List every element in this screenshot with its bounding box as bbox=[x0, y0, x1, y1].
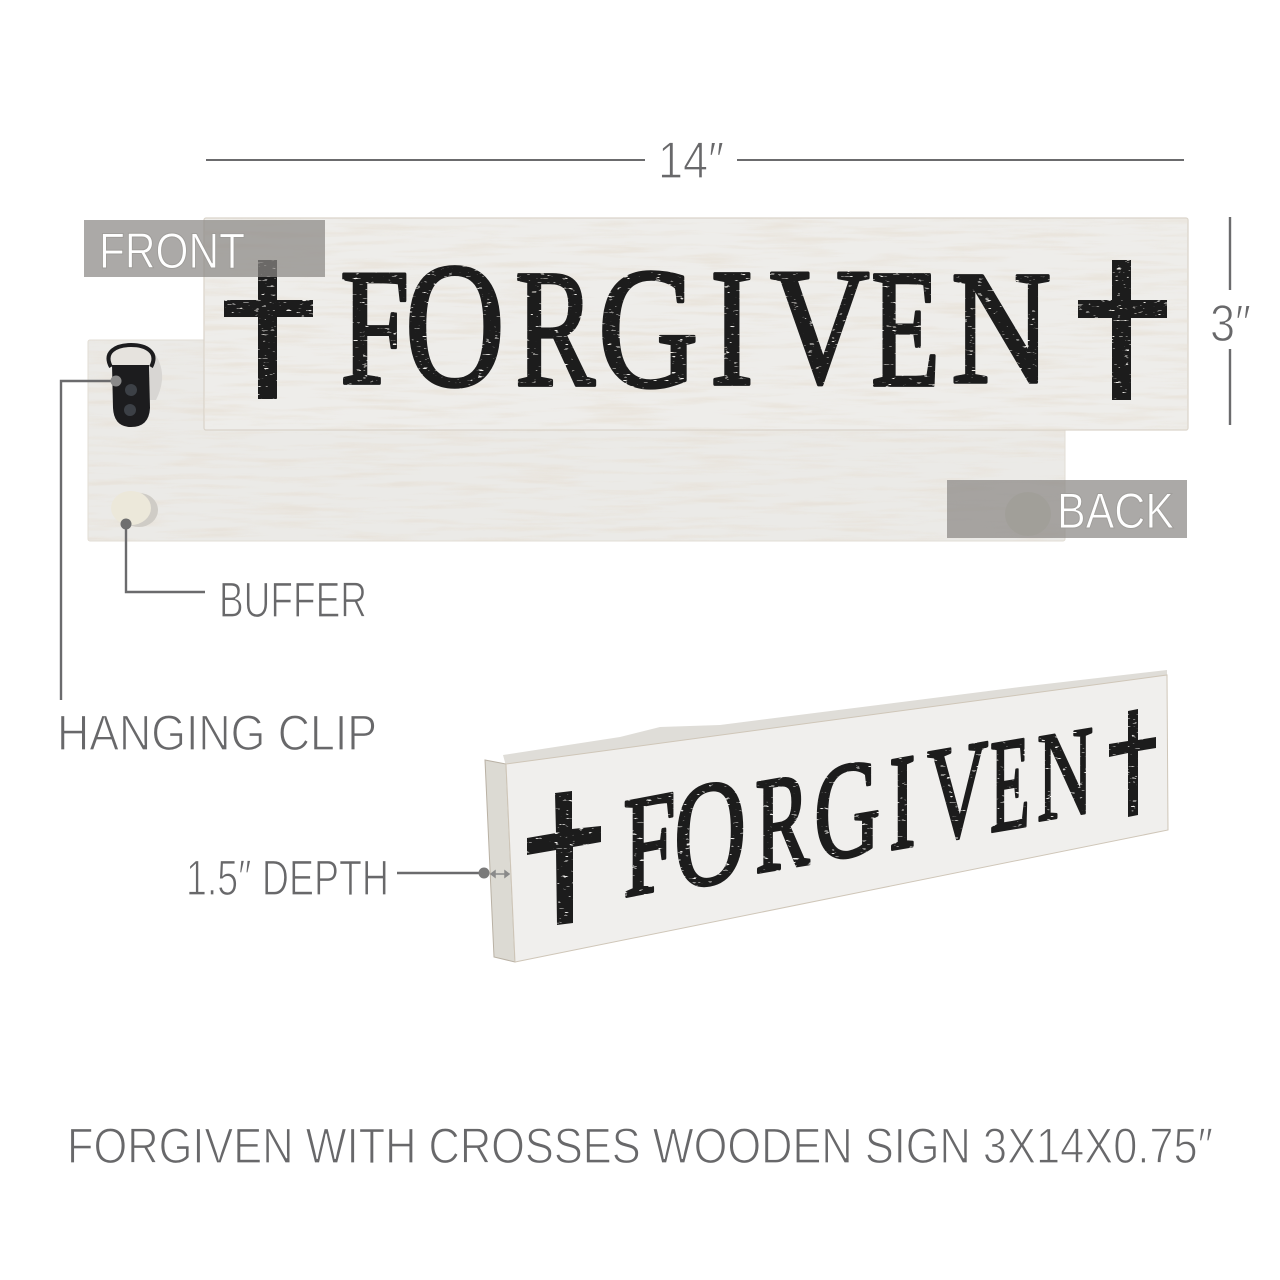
sign lettering: FORGIVEN: O bbox=[674, 744, 746, 923]
sign lettering: FORGIVEN: V bbox=[770, 235, 870, 419]
sign depth side bbox=[485, 760, 515, 962]
sign lettering: FORGIVEN: F bbox=[623, 759, 676, 929]
callout: buffer: BUFFER bbox=[219, 572, 367, 628]
cross left bbox=[224, 260, 313, 399]
sign lettering: FORGIVEN: R bbox=[755, 742, 810, 903]
cross right bbox=[1109, 709, 1156, 817]
sign lettering: FORGIVEN: G bbox=[598, 233, 698, 423]
sign lettering: FORGIVEN: N bbox=[951, 238, 1051, 417]
front of sign bbox=[204, 218, 1188, 430]
angled view of sign bbox=[485, 670, 1168, 962]
sign lettering: FORGIVEN: I bbox=[710, 235, 754, 421]
height dimension: 3 inches: 3″ bbox=[1210, 295, 1251, 353]
icon: buffer bbox=[111, 491, 158, 527]
label: BACK: BACK bbox=[1057, 483, 1174, 539]
icon: hanging clip bbox=[109, 345, 162, 427]
sign lettering: FORGIVEN: N bbox=[1037, 699, 1093, 849]
sign lettering: FORGIVEN: O bbox=[405, 227, 505, 424]
sign lettering: FORGIVEN: E bbox=[990, 706, 1030, 861]
cross right bbox=[1078, 260, 1167, 400]
callout: hanging clip: HANGING CLIP bbox=[57, 705, 377, 761]
sign lettering: FORGIVEN: E bbox=[871, 235, 940, 421]
sign top edge bbox=[503, 670, 1167, 766]
icon: second buffer under back label bbox=[1005, 492, 1051, 536]
sign lettering: FORGIVEN: V bbox=[927, 711, 988, 872]
sign lettering: FORGIVEN: F bbox=[340, 235, 410, 419]
callout: buffer bbox=[120, 518, 367, 628]
label: FRONT bbox=[84, 220, 325, 279]
callout: hanging clip bbox=[57, 376, 377, 761]
back of sign bbox=[88, 340, 1065, 541]
cross left bbox=[527, 791, 601, 925]
sign lettering: FORGIVEN bbox=[623, 699, 1093, 929]
label: FRONT: FRONT bbox=[99, 223, 245, 279]
sign lettering: FORGIVEN: G bbox=[814, 729, 880, 892]
sign lettering: FORGIVEN: R bbox=[515, 235, 596, 422]
depth arrow bbox=[491, 871, 509, 877]
label: BACK bbox=[947, 480, 1187, 539]
sign lettering: FORGIVEN: I bbox=[889, 725, 916, 880]
sign lettering: FORGIVEN bbox=[340, 227, 1051, 424]
width dimension: 14 inches: 14″ bbox=[658, 132, 724, 190]
sign face bbox=[506, 675, 1168, 962]
callout: 1.5 inch depth: 1.5″ DEPTH bbox=[186, 850, 389, 906]
